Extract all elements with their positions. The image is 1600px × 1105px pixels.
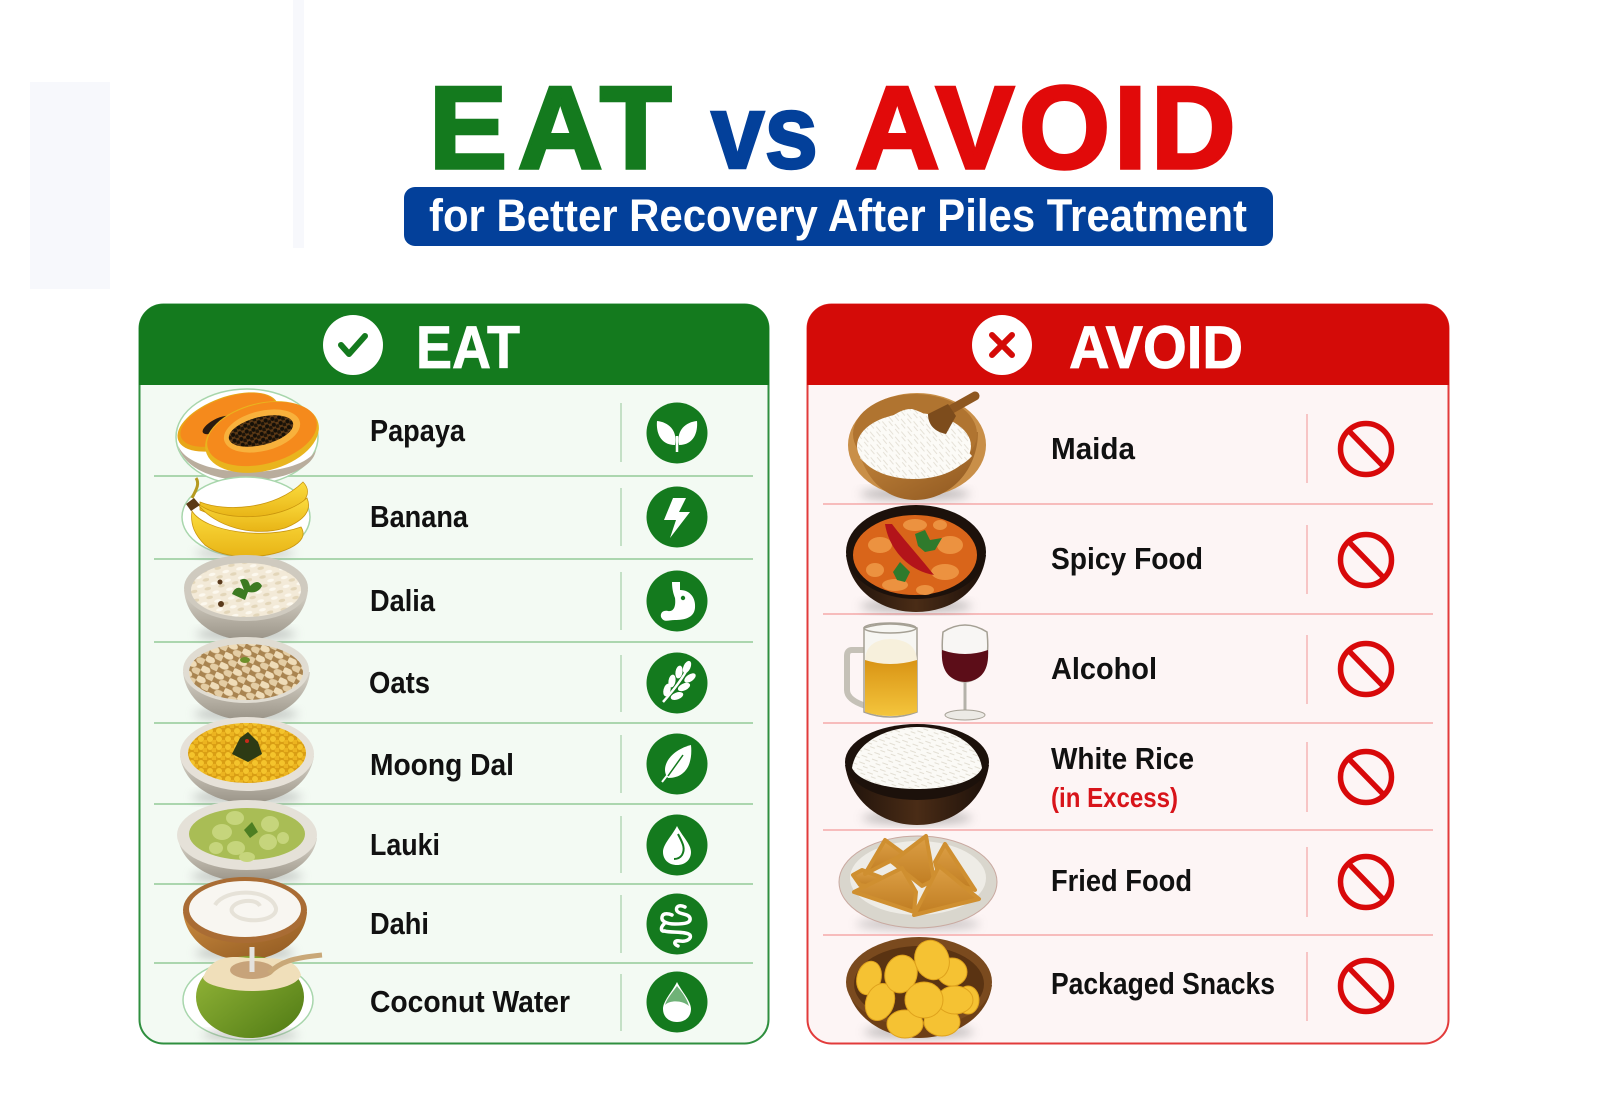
- icon: sprout: [646, 402, 708, 464]
- eat header: EAT: [416, 314, 520, 381]
- label: white rice: White Rice: [1051, 741, 1194, 776]
- title: vs: [711, 73, 818, 191]
- label: packaged snacks: Packaged Snacks: [1051, 966, 1275, 1001]
- food: lauki: [177, 800, 317, 882]
- title: EAT: [429, 62, 671, 193]
- faint background strips: [30, 0, 304, 289]
- icon: ban: [1340, 752, 1392, 802]
- icon: ban: [1340, 424, 1392, 474]
- icon: water drop: [646, 814, 708, 876]
- label: banana: Banana: [370, 499, 469, 534]
- icon: intestine: [646, 894, 708, 954]
- label: spicy food: Spicy Food: [1051, 541, 1203, 576]
- subtitle banner: for Better Recovery After Piles Treatment: [429, 190, 1247, 241]
- icon: ban: [1340, 644, 1392, 694]
- avoid header: AVOID: [1069, 314, 1243, 381]
- food: coconut water: [183, 947, 322, 1040]
- label: maida: Maida: [1051, 431, 1136, 466]
- label: alcohol: Alcohol: [1051, 651, 1157, 686]
- icon: stomach: [646, 570, 708, 632]
- icon: ban: [1340, 534, 1392, 586]
- icon: ban: [1340, 960, 1392, 1012]
- food: spicy curry: [846, 505, 986, 612]
- label: moong dal: Moong Dal: [370, 747, 514, 782]
- icon: ban: [1340, 856, 1392, 908]
- food: oats: [183, 637, 310, 720]
- label: oats: Oats: [369, 665, 430, 700]
- panel: avoid: [807, 304, 1449, 1044]
- food: packaged snacks: [846, 935, 992, 1038]
- label: papaya: Papaya: [370, 413, 466, 448]
- icon: wheat: [646, 652, 708, 714]
- avoid header: [807, 304, 1449, 385]
- food: fried samosa: [839, 836, 997, 930]
- label: coconut water: Coconut Water: [370, 984, 570, 1019]
- label: fried food: Fried Food: [1051, 863, 1192, 898]
- food: maida: [848, 393, 986, 500]
- label: dalia: Dalia: [370, 583, 436, 618]
- food: dalia: [184, 555, 308, 640]
- food: papaya: [170, 380, 327, 485]
- icon: leaf: [646, 734, 708, 794]
- title: AVOID: [855, 62, 1236, 193]
- label: white rice: [1051, 741, 1194, 813]
- label: lauki: Lauki: [370, 827, 440, 862]
- title: [429, 62, 1236, 193]
- food: banana: [182, 477, 310, 558]
- food: alcohol: [847, 623, 988, 720]
- food: white rice: [845, 724, 989, 825]
- label: dahi: Dahi: [370, 906, 429, 941]
- food: moong dal: [180, 717, 314, 803]
- eat header: [139, 304, 769, 385]
- icon: lightning: [646, 486, 708, 548]
- panel: eat: [139, 304, 769, 1044]
- food: dahi: [183, 877, 307, 960]
- label: white rice: (in Excess): [1051, 782, 1178, 813]
- icon: coconut drop: [646, 972, 708, 1032]
